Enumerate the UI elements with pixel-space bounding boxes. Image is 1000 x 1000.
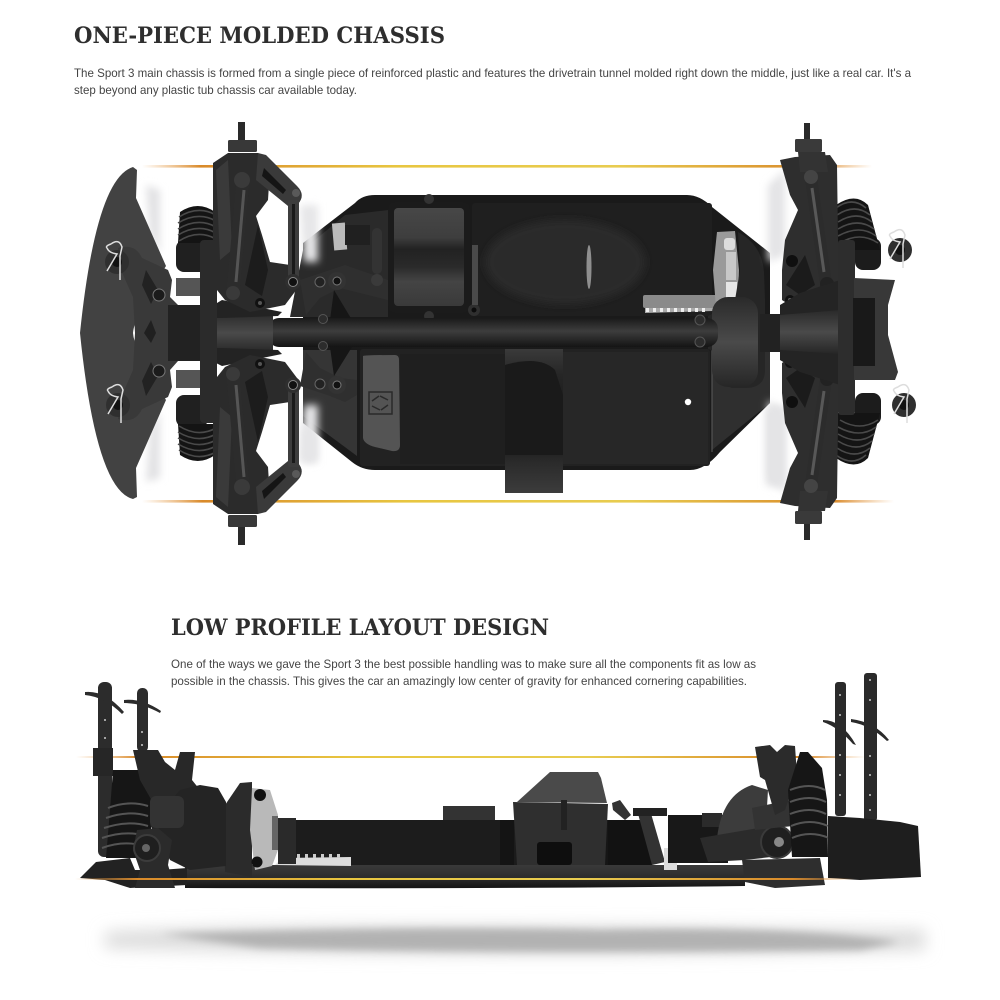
lower tray xyxy=(360,349,710,466)
steering bellcranks xyxy=(300,223,388,402)
center driveshaft tunnel xyxy=(268,318,718,347)
side-view chassis xyxy=(75,673,921,888)
rear differential xyxy=(780,310,840,354)
left gear housing xyxy=(150,785,226,870)
rear bumper foam xyxy=(828,816,921,880)
left tower xyxy=(133,750,200,815)
left body posts xyxy=(85,682,161,857)
intro paragraph: low profile: possible in the chassis. This gives the car an amazingly low center of gravity for enhanced cornering capabilities. xyxy=(171,674,747,688)
battery strap xyxy=(505,349,563,493)
soft shadows xyxy=(146,185,784,486)
chassis plate xyxy=(303,195,770,470)
front corner assemblies xyxy=(176,122,318,545)
right gear housing xyxy=(717,785,768,840)
ground shadow xyxy=(105,925,925,955)
steering area texture xyxy=(290,210,388,317)
intro paragraph: low profile: One of the ways we gave the Sport 3 the best possible handling was to make sure all the components fit as low as xyxy=(171,657,756,671)
mounting hole xyxy=(685,399,691,405)
intro paragraph: low profile xyxy=(171,657,756,688)
title: low profile layout design: LOW PROFILE LAYOUT DESIGN xyxy=(171,615,549,641)
right body posts xyxy=(823,673,889,821)
intro paragraph: chassis: The Sport 3 main chassis is formed from a single piece of reinforced plastic and features the drivetrain tunnel molded right down the middle, just like a real car. It's a xyxy=(74,66,911,80)
right tower xyxy=(755,745,797,815)
right shock xyxy=(788,752,829,857)
receiver box xyxy=(363,355,400,451)
bumper mount xyxy=(118,247,178,420)
left knuckle xyxy=(80,796,187,888)
spur gear and motor mount xyxy=(643,231,739,313)
intro paragraph: chassis xyxy=(74,66,911,97)
top width guide lines xyxy=(142,165,894,503)
top-view chassis xyxy=(80,122,916,545)
motor mount xyxy=(223,782,296,877)
right knuckle xyxy=(700,800,825,888)
servo box side xyxy=(513,772,608,865)
body clips xyxy=(105,230,916,423)
front differential xyxy=(217,313,273,353)
spur gear xyxy=(275,854,351,866)
servo box xyxy=(388,194,480,321)
upper tray xyxy=(472,203,712,316)
front bumper foam xyxy=(80,167,166,499)
servo link and mount xyxy=(500,800,728,870)
rear bulkhead xyxy=(854,278,898,380)
left shock xyxy=(102,770,152,858)
low center line xyxy=(75,878,855,880)
strap end xyxy=(443,806,495,820)
gearbox bell xyxy=(708,232,765,388)
title: one-piece molded chassis: ONE-PIECE MOLDED CHASSIS xyxy=(74,23,445,49)
drivetrain tunnel side xyxy=(292,820,532,865)
rear corner assemblies xyxy=(768,123,898,540)
chassis plate side xyxy=(185,865,745,888)
intro paragraph: chassis: step beyond any plastic tub chassis car available today. xyxy=(74,83,357,97)
height guide line top xyxy=(76,756,866,758)
